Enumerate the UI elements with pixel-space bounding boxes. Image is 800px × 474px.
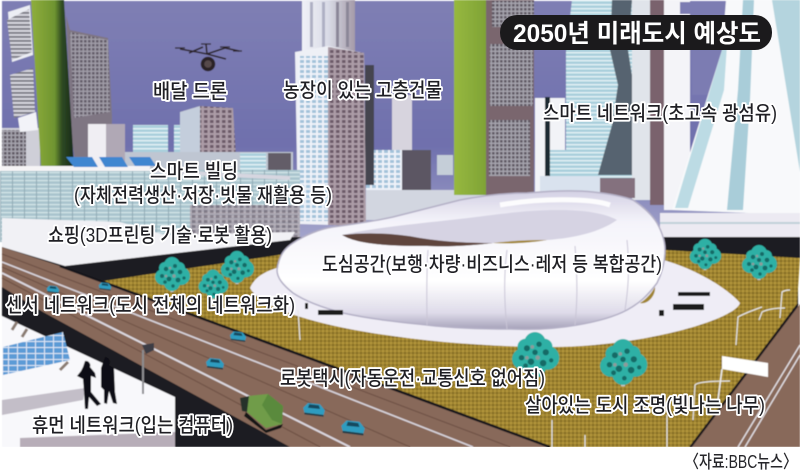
street lights (298, 290, 790, 447)
glowing trees (155, 239, 777, 386)
tall farm high-rise (295, 0, 366, 226)
right road (690, 304, 800, 447)
label: human network: 휴먼 네트워크(입는 컴퓨터) (32, 414, 233, 437)
left green tower (31, 0, 74, 167)
center distance buildings (88, 65, 486, 220)
plaza (250, 255, 740, 347)
right glass towers (535, 0, 725, 210)
doughnut urban space (277, 191, 665, 329)
main diagonal road (2, 247, 550, 447)
lower-left rooftop building (2, 316, 175, 447)
label: delivery drone: 배달 드론 (153, 80, 227, 103)
ground base (2, 237, 798, 447)
top-right black road band (665, 237, 800, 258)
label: smart building detail: (자체전력생산·저장·빗물 재활용 등) (74, 184, 332, 207)
label: shopping: 쇼핑(3D프린팅 기술·로봇 활용) (48, 224, 272, 247)
label: smart building: 스마트 빌딩 (150, 160, 238, 183)
icon: solar panels on roof (66, 157, 156, 167)
label: robot taxi: 로봇택시(자동운전·교통신호 없어짐) (280, 367, 545, 390)
label: smart network: 스마트 네트워크(초고속 광섬유) (543, 102, 777, 125)
people silhouettes (77, 357, 117, 409)
shopping building slab (2, 218, 295, 266)
lamp post with camera (142, 343, 154, 394)
low glass building with solar panels (0, 157, 300, 242)
gold field (103, 250, 800, 447)
left buildings (2, 5, 112, 170)
road sign (718, 356, 768, 400)
label: sensor network: 센서 네트워크(도시 전체의 네트워크화) (6, 294, 295, 317)
green truck (240, 394, 283, 433)
crowd (305, 292, 710, 316)
robot taxis (47, 282, 365, 435)
label: urban space: 도심공간(보행·차량·비즈니스·레저 등 복합공간) (322, 253, 662, 276)
inner surface of the ring (342, 210, 617, 246)
right white pylon (660, 0, 800, 239)
delivery drone (175, 44, 242, 70)
right grid building (486, 0, 534, 196)
title pill: 2050년 미래도시 예상도 (513, 20, 761, 48)
icon: rooftop solar panel (3, 332, 70, 375)
right green tower (454, 0, 486, 195)
sky (2, 1, 798, 241)
gold sliver right of ring (640, 287, 655, 303)
label: high-rise with farm: 농장이 있는 고층건물 (283, 79, 442, 102)
label: living city light: 살아있는 도시 조명(빛나는 나무) (525, 394, 765, 417)
